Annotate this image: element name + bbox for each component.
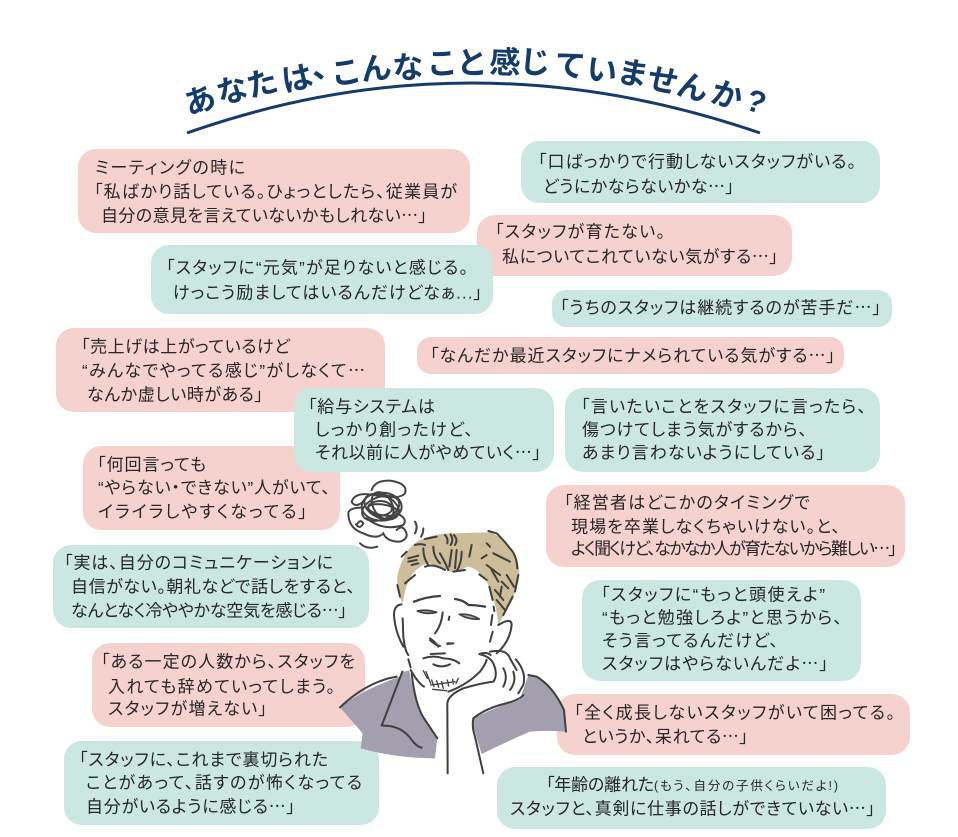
body: shirt, neck, arm and hand (340, 640, 566, 773)
bubble: use your head: そう言ってるんだけど、 (602, 632, 778, 650)
bubble: irritated (83, 446, 340, 530)
bubble: staff do not grow: 「スタッフが育たない。 (495, 222, 665, 242)
bubble: age gap (497, 767, 886, 829)
bubble: irritated: 「何回言っても (97, 456, 206, 474)
bubble: sales rising but empty: 「売上げは上がっているけど (81, 338, 291, 356)
bubble: irritated: イライラしやすくなってる」 (98, 502, 307, 522)
bubble: communication confidence: 自信がない。朝礼などで話しをすると、 (71, 578, 355, 596)
bubble: afraid of hurting staff (565, 388, 880, 472)
bubble: sales rising but empty (56, 328, 385, 412)
bubble: communication confidence: 「実は、自分のコミュニケーションに (64, 554, 333, 572)
bubble: age gap: スタッフと、真剣に仕事の話しができていない…」 (510, 794, 875, 820)
bubble: quitting staff: 「ある一定の人数から、スタッフを (101, 652, 355, 672)
bubble: betrayed (64, 741, 379, 825)
bubble: quitting staff (92, 643, 365, 727)
bubble: staff do not grow (477, 215, 792, 276)
head: hair and face (394, 531, 519, 655)
bubble: looked down on: 「なんだか最近スタッフにナメられている気がする…」 (430, 342, 835, 366)
title arc underline (187, 83, 760, 133)
bubble: meeting: ミーティングの時に (95, 158, 245, 178)
bubble: sales rising but empty: “みんなでやってる感じ”がしなくて… (82, 356, 365, 382)
bubble: graduating from the field: 「経営者はどこかのタイミングで (564, 494, 810, 512)
illustration: worried man (340, 481, 566, 773)
bubble: cannot continue: 「うちのスタッフは継続するのが苦手だ…」 (560, 294, 881, 318)
bubble: afraid of hurting staff: 傷つけてしまう気がするから、 (582, 420, 807, 440)
bubble: salary system: しっかり創ったけど、 (315, 420, 473, 440)
bubble: quitting staff: 入れても辞めていってしまう。 (108, 678, 335, 696)
bubble: cannot continue (552, 290, 892, 327)
bubble: lack of energy (151, 245, 493, 314)
bubble: all talk no action (521, 141, 880, 203)
bubble: meeting: 「私ばかり話している。ひょっとしたら、従業員が (94, 182, 457, 202)
bubble: staff do not grow: 私についてこれていない気がする…」 (502, 242, 778, 268)
bubble: meeting: 自分の意見を言えていないかもしれない…」 (101, 202, 427, 226)
title: あなたは、こんなこと感じていませんか? (180, 44, 771, 122)
bubble: salary system: それ以前に人がやめていく…」 (315, 438, 541, 464)
bubble: age gap: (もう、自分の子供くらいだよ!) (654, 779, 838, 793)
bubble: use your head: “もっと勉強しろよ”と思うから、 (602, 608, 842, 628)
bubble: afraid of hurting staff: 「言いたいことをスタッフに言ったら、 (581, 398, 866, 416)
bubble: lack of energy: 「スタッフに“元気”が足りないと感じる。 (166, 258, 468, 278)
bubble: looked down on (417, 337, 844, 374)
bubble: no growth: というか、呆れてる…」 (582, 722, 748, 748)
scribble above head (348, 481, 423, 548)
bubble: no growth (557, 694, 910, 755)
bubble: all talk no action: 「口ばっかりで行動しないスタッフがいる。 (538, 152, 856, 172)
bubble: use your head (582, 580, 861, 681)
bubble: irritated: “やらない・できない”人がいて、 (98, 478, 330, 498)
bubble: quitting staff: スタッフが増えない」 (108, 700, 267, 718)
bubble: lack of energy: けっこう励ましてはいるんだけどなぁ...」 (173, 284, 482, 302)
bubble: graduating from the field (546, 485, 905, 567)
bubble: betrayed: 自分がいるように感じる…」 (86, 792, 295, 818)
bubble: use your head: 「スタッフに“もっと頭使えよ” (601, 584, 825, 604)
bubble: communication confidence: なんとなく冷ややかな空気を感じる…」 (71, 596, 347, 622)
bubble: salary system: 「給与システムは (308, 398, 435, 416)
bubble: meeting (78, 149, 470, 233)
bubble: graduating from the field: よく聞くけど、なかなか人が育たないから難しい…」 (571, 534, 897, 560)
bubble: afraid of hurting staff: あまり言わないようにしている」 (582, 444, 825, 462)
bubble: sales rising but empty: なんか虚しい時がある」 (87, 386, 263, 404)
bubble: salary system (294, 388, 554, 472)
bubble: betrayed: ことがあって、話すのが怖くなってる (86, 774, 362, 792)
bubble: use your head: スタッフはやらないんだよ…」 (602, 650, 828, 674)
bubble: all talk no action: どうにかならないかな…」 (543, 172, 734, 198)
bubble: betrayed: 「スタッフに、これまで裏切られた (79, 750, 328, 770)
bubble: no growth: 「全く成長しないスタッフがいて困ってる。 (574, 704, 895, 722)
bubble: communication confidence (53, 545, 369, 628)
bubble: graduating from the field: 現場を卒業しなくちゃいけない。と、 (571, 518, 840, 536)
bubble: age gap: 「年齢の離れた (546, 776, 654, 794)
